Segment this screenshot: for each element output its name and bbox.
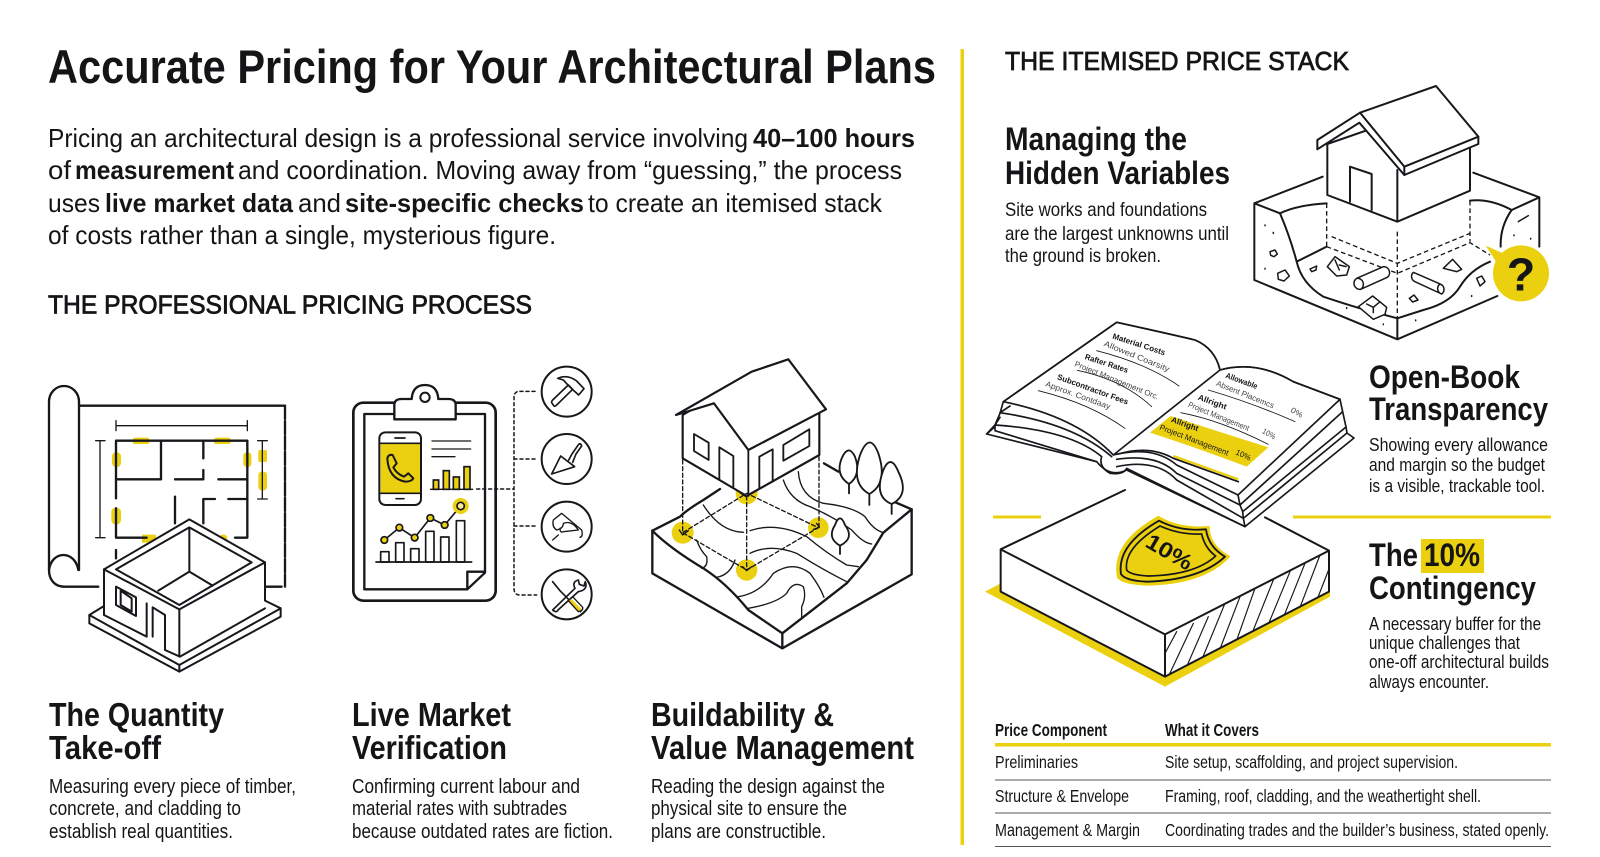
column 3 text: buildability and value management xyxy=(651,696,914,843)
text: open-book transparency: Showing every allowance xyxy=(1369,434,1548,455)
text: managing the hidden variables: Site works and foundations xyxy=(1005,199,1207,221)
text: the 10% contingency xyxy=(1369,537,1549,692)
page text: Rafter Rates xyxy=(1084,352,1130,375)
trees xyxy=(832,442,903,554)
column 2 text: live market verification: Live Market xyxy=(352,696,511,733)
text: the 10% contingency: A necessary buffer for the xyxy=(1369,613,1541,634)
illustration: open book xyxy=(987,322,1354,527)
icon: hammer xyxy=(542,367,592,417)
question bubble: ? xyxy=(1507,249,1535,301)
text: managing the hidden variables: are the largest unknowns until xyxy=(1005,223,1229,245)
table: price components xyxy=(995,720,1551,847)
text: managing the hidden variables: Hidden Variables xyxy=(1005,155,1230,191)
base shadow xyxy=(985,583,1330,687)
intro paragraph: to create an itemised stack xyxy=(588,188,883,218)
table: price components: Site setup, scaffolding, and project supervision. xyxy=(1165,752,1458,772)
shield xyxy=(1117,517,1228,584)
column 1 text: the quantity take-off: Measuring every piece of timber, xyxy=(49,776,296,798)
page text xyxy=(1044,332,1304,463)
column 3 text: buildability and value management: Buildability & xyxy=(651,696,834,733)
divider: vertical yellow rule xyxy=(960,49,964,845)
page text: Project Management xyxy=(1158,423,1231,458)
dashed survey lines xyxy=(683,457,819,570)
intro paragraph: uses xyxy=(48,188,100,218)
page text: Material Costs xyxy=(1111,332,1167,357)
shield: 10% xyxy=(1141,529,1197,575)
column 1 text: the quantity take-off: The Quantity xyxy=(49,696,225,733)
column 3 text: buildability and value management: physical site to ensure the xyxy=(651,798,847,820)
illustration: house with hidden ground xyxy=(1254,86,1549,339)
intro paragraph: and xyxy=(298,188,341,218)
text: managing the hidden variables: Managing the xyxy=(1005,121,1187,157)
text: the 10% contingency: unique challenges that xyxy=(1369,632,1520,653)
column 1 text: the quantity take-off: Take-off xyxy=(49,729,162,766)
icon: trowel xyxy=(542,434,592,484)
title: Accurate Pricing for Your Architectural Plans xyxy=(48,40,936,93)
dashed connectors xyxy=(477,391,537,595)
column 2 text: live market verification: because outdated rates are fiction. xyxy=(352,821,613,843)
intro paragraph: of xyxy=(48,155,72,185)
question bubble xyxy=(1486,245,1549,301)
page text: Allright xyxy=(1170,415,1200,433)
illustration: clipboard with market data and trade icons xyxy=(353,367,592,619)
heading: the itemised price stack: THE ITEMISED PRICE STACK xyxy=(1005,48,1349,76)
text: the 10% contingency: Contingency xyxy=(1369,570,1536,606)
page text: Approx. Contdaay xyxy=(1044,379,1112,411)
intro paragraph: of costs rather than a single, mysterious figure. xyxy=(48,220,556,250)
illustration: 10% contingency block xyxy=(985,489,1330,687)
page text: Allowable xyxy=(1224,371,1259,391)
column 2 text: live market verification: material rates with subtrades xyxy=(352,798,567,820)
text: open-book transparency: Transparency xyxy=(1369,391,1548,427)
page text: 10% xyxy=(1261,427,1277,441)
page text: 10% xyxy=(1234,448,1252,463)
text: the 10% contingency: The xyxy=(1369,537,1418,573)
text: the 10% contingency: 10% xyxy=(1424,537,1480,573)
intro paragraph xyxy=(48,123,915,250)
mini bar chart xyxy=(431,441,473,489)
column 3 text: buildability and value management: plans are constructible. xyxy=(651,821,826,843)
illustration: house over site contours xyxy=(652,359,912,648)
page text: Allowed Coarsity xyxy=(1103,339,1171,374)
page text: Project Management Orc. xyxy=(1073,360,1160,402)
icon: crossed wrench and screwdriver xyxy=(542,569,592,619)
text: open-book transparency: and margin so the budget xyxy=(1369,454,1545,475)
text: the 10% contingency: one-off architectural builds xyxy=(1369,651,1549,672)
table: price components: Management & Margin xyxy=(995,820,1140,840)
page text: Project Management xyxy=(1187,400,1251,433)
column 1 text: the quantity take-off xyxy=(49,696,296,843)
text: managing the hidden variables xyxy=(1005,121,1230,267)
column 2 text: live market verification: Confirming current labour and xyxy=(352,776,580,798)
clipboard xyxy=(353,385,496,601)
intro paragraph: Pricing an architectural design is a professional service involving xyxy=(48,123,748,153)
text: managing the hidden variables: the ground is broken. xyxy=(1005,245,1161,267)
phone xyxy=(379,432,421,505)
column 2 text: live market verification xyxy=(352,696,613,843)
page text: Absent Placemcs xyxy=(1215,379,1275,410)
illustration: blueprint and shell xyxy=(49,386,285,672)
page text: Subcontractor Fees xyxy=(1056,372,1130,407)
table: price components: Preliminaries xyxy=(995,752,1078,772)
text: open-book transparency: is a visible, trackable tool. xyxy=(1369,475,1545,496)
column 1 text: the quantity take-off: concrete, and cladding to xyxy=(49,798,241,820)
page text: Allright xyxy=(1197,393,1228,412)
survey points xyxy=(672,482,829,581)
text: open-book transparency: Open-Book xyxy=(1369,359,1520,395)
accents: yellow dashes beside book xyxy=(993,516,1551,518)
intro paragraph: site-specific checks xyxy=(345,188,584,218)
ground block xyxy=(1254,173,1539,339)
column 3 text: buildability and value management: Value Management xyxy=(651,729,914,766)
heading: the professional pricing process: THE PROFESSIONAL PRICING PROCESS xyxy=(48,292,532,320)
text: the 10% contingency: always encounter. xyxy=(1369,671,1489,692)
table: price components: What it Covers xyxy=(1165,720,1259,740)
page stack xyxy=(987,322,1354,527)
page text: 0% xyxy=(1289,406,1304,420)
house xyxy=(676,359,826,496)
intro paragraph: and coordination. Moving away from “guessing,” the process xyxy=(238,155,902,185)
table: price components: Price Component xyxy=(995,720,1107,740)
column 1 text: the quantity take-off: establish real quantities. xyxy=(49,821,233,843)
table: price components: Framing, roof, cladding, and the weathertight shell. xyxy=(1165,786,1481,806)
intro paragraph: 40–100 hours xyxy=(753,123,915,153)
table: price components: Structure & Envelope xyxy=(995,786,1129,806)
intro paragraph: measurement xyxy=(75,155,234,185)
page rules xyxy=(1038,351,1295,444)
slab xyxy=(1001,469,1335,677)
icon: tag xyxy=(542,502,592,552)
line and bar chart xyxy=(376,498,472,562)
column 3 text: buildability and value management: Reading the design against the xyxy=(651,776,885,798)
house xyxy=(1317,86,1478,222)
intro paragraph: live market data xyxy=(105,188,294,218)
text: open-book transparency xyxy=(1369,359,1548,496)
column 2 text: live market verification: Verification xyxy=(352,729,507,766)
highlighted row xyxy=(1150,416,1268,467)
terrain block xyxy=(652,463,912,648)
